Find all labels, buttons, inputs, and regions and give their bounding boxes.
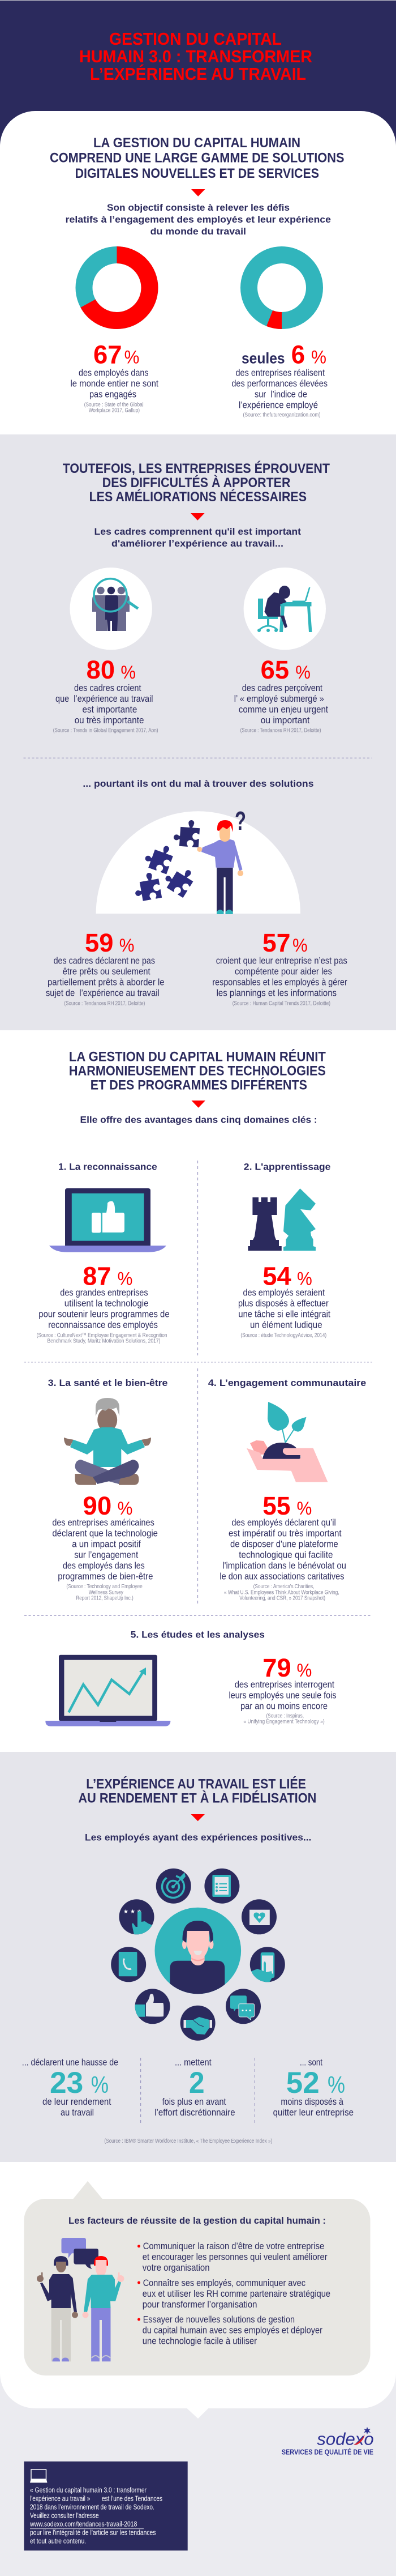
stat: 52%: 52 [286, 2066, 320, 2100]
arrow [191, 513, 205, 521]
icon: star rating touch: ★ [137, 1909, 141, 1915]
heading: harmonisation: ET DES PROGRAMMES DIFFÉRENTS [91, 1077, 307, 1093]
title: HUMAIN 3.0 : TRANSFORMER [79, 46, 312, 66]
stat: 80%: que l’expérience au travail [55, 693, 153, 704]
domain 3: health: des employés dans les [63, 1560, 145, 1571]
domain 2: learning: 2. L'apprentissage [244, 1161, 330, 1172]
icon: star rating touch: ★ [123, 1909, 128, 1915]
arrow [191, 1101, 205, 1108]
stat: 59%: sujet de l’expérience au travail [46, 988, 160, 999]
subheading: objective: relatifs à l’engagement des employés et leur expérience [66, 214, 331, 225]
subheading: executives [94, 526, 301, 549]
domain 3: health: Report 2012, ShapeUp Inc.) [76, 1594, 134, 1601]
text: further reading [29, 2486, 162, 2545]
panel: solutions [0, 111, 396, 434]
stat: 59%: (Source : Tendances RH 2017, Deloitte) [64, 1000, 145, 1006]
stat: 80%: des cadres croient [74, 683, 141, 693]
stat: 80%: % [120, 662, 136, 683]
domain 3: health [48, 1377, 167, 1601]
stat: 57%: (Source : Human Capital Trends 2017, Deloitte) [233, 1000, 330, 1006]
domain 2: learning: % [297, 1268, 312, 1289]
stat: 67%: 67 [93, 340, 122, 369]
illustration: man with puzzle pieces [96, 806, 300, 914]
logo: sodexo: sodexo [317, 2429, 374, 2449]
domain 2: learning [238, 1161, 330, 1338]
logo: sodexo: SERVICES DE QUALITÉ DE VIE [282, 2448, 373, 2456]
domain 1: recognition [37, 1161, 170, 1344]
stat: 23%: 23 [50, 2066, 83, 2100]
heading: difficulties: TOUTEFOIS, LES ENTREPRISES ÉPROUVENT [63, 460, 330, 476]
success factors list: Essayer de nouvelles solutions de gestion [143, 2314, 295, 2325]
stat: 59%: % [119, 935, 135, 956]
icon: heart on screen [242, 1899, 277, 1934]
title: GESTION DU CAPITAL [109, 29, 282, 49]
panel: performance and retention [23, 1776, 353, 2144]
panel: difficulties [0, 434, 396, 1030]
stat: 65%: ou important [261, 715, 310, 726]
icon: laptop with thumb up [49, 1188, 166, 1252]
stat: 59% [46, 928, 165, 1006]
title [79, 29, 312, 84]
icon: overwhelmed employee [244, 568, 326, 650]
illustration: employee in central circle [155, 1908, 241, 1994]
stat: 2 times: l’effort discrétionnaire [154, 2107, 235, 2118]
subheading: five areas: Elle offre des avantages dans cinq domaines clés : [80, 1114, 317, 1125]
stat: 67%: des employés dans [79, 367, 148, 378]
illustration: two employees talking [37, 2238, 124, 2361]
domain 4: community engagement: 55 [262, 1491, 290, 1520]
icon: phone touch [250, 1947, 285, 1982]
icon: laptop with rising chart [45, 1655, 170, 1726]
domain 1: recognition: pour soutenir leurs programmes de [38, 1309, 170, 1320]
domain 1: recognition: Benchmark Study, Maritz Motivation Solutions, 2017) [48, 1337, 161, 1344]
domain 3: health: 3. La santé et le bien-être [48, 1377, 167, 1388]
header band [0, 0, 396, 153]
success factors list: du capital humain avec ses employés et déployer [143, 2325, 322, 2336]
domain 4: community engagement: de disposer d'une plateforme [230, 1539, 338, 1550]
domain 2: learning: plus disposés à effectuer [238, 1298, 329, 1309]
arrow [191, 189, 205, 197]
domain 5: studies and analytics: « Unifying Engagement Technology ») [243, 1718, 325, 1725]
domain 2: learning: un élément ludique [250, 1320, 322, 1330]
stat: 80%: 80 [87, 655, 115, 684]
success factors list: Communiquer la raison d’être de votre entreprise [143, 2241, 324, 2251]
stat: 6%: seules [242, 350, 285, 367]
text: further reading: pour lire l'intégralité de l’article sur les tendances [30, 2528, 156, 2536]
success factors list: votre organisation [143, 2262, 209, 2273]
domain 3: health: (Source : Technology and Employee [66, 1583, 143, 1590]
domain 5: studies and analytics: (Source : Inspirus, [266, 1713, 304, 1720]
stat: 67%: % [124, 347, 139, 368]
domain 3: health: 90 [83, 1491, 111, 1520]
text: further reading: l'expérience au travail » [30, 2494, 90, 2502]
stat: 6%: (Source: thefutureorganization.com) [243, 412, 320, 419]
domain 3: health: % [118, 1498, 132, 1519]
stat: 59%: être prêts ou seulement [63, 966, 150, 977]
domain 2: learning: 54 [262, 1261, 291, 1290]
success factors list: pour transformer l’organisation [143, 2299, 257, 2310]
heading: difficulties: LES AMÉLIORATIONS NÉCESSAIRES [89, 489, 307, 505]
icon: star rating touch: ★ [130, 1909, 135, 1915]
stat: 52%: ... sont [300, 2057, 322, 2068]
stat: 6%: l’expérience employé [239, 399, 318, 410]
stat: 57%: 57 [262, 928, 290, 957]
domain 5: studies and analytics: 79 [262, 1653, 291, 1682]
domain 3: health: a un impact positif [72, 1539, 141, 1550]
stat: 65%: (Source : Tendances RH 2017, Deloitte) [240, 727, 321, 734]
success factors list: et encourager les personnes qui veulent améliorer [143, 2251, 328, 2262]
domain 3: health: déclarent que la technologie [52, 1528, 158, 1539]
success factors list: Connaître ses employés, communiquer avec [143, 2278, 305, 2288]
stat: 57%: % [292, 935, 308, 956]
domain 1: recognition: (Source : CultureNext™ Employee Engagement & Recognition [37, 1332, 167, 1338]
stat: 6%: sur l’indice de [255, 389, 307, 399]
icon: thumb up [135, 1989, 170, 2024]
heading: solutions: LA GESTION DU CAPITAL HUMAIN [93, 135, 300, 151]
subheading: objective: Son objectif consiste à relever les défis [107, 202, 290, 213]
stat: 67%: le monde entier ne sont [70, 378, 158, 389]
domain 4: community engagement: le don aux associations caritatives [219, 1571, 344, 1582]
stat: 23%: % [91, 2071, 109, 2098]
stat: 59%: partiellement prêts à aborder le [48, 977, 165, 988]
stat: 2 times: fois plus en avant [162, 2096, 226, 2107]
text: further reading: 2018 dans l’environnement de travail de Sodexo. [30, 2503, 154, 2511]
stat: 2 times [154, 2057, 235, 2118]
source: (Source : IBM® Smarter Workforce Institute, « The Employee Experience Index ») [104, 2138, 272, 2144]
domain 4: community engagement: (Source : America's Charities, [253, 1583, 314, 1590]
icon: star rating touch [119, 1899, 154, 1935]
text: further reading: www.sodexo.com/tendances-travail-2018 [29, 2520, 137, 2528]
domain 2: learning: une tâche si elle intégrait [238, 1309, 330, 1320]
heading: solutions [50, 135, 344, 181]
domain 5: studies and analytics: leurs employés une seule fois [229, 1690, 337, 1700]
domain 5: studies and analytics [45, 1630, 337, 1726]
stat: 59%: 59 [85, 928, 113, 957]
stat: 6%: 6 [291, 340, 305, 369]
stat: 57%: les plannings et les informations [217, 988, 337, 999]
stat: 65%: l’ « employé submergé » [234, 693, 324, 704]
stat: 80%: (Source : Trends in Global Engagement 2017, Aon) [53, 727, 158, 734]
arrow [191, 1814, 205, 1821]
heading: solutions: COMPREND UNE LARGE GAMME DE SOLUTIONS [50, 151, 344, 166]
stat: 65%: 65 [261, 655, 289, 684]
domain 4: community engagement: 4. L’engagement communautaire [208, 1377, 366, 1388]
stat: 67%: (Source : State of the Global [84, 402, 144, 408]
domain 4: community engagement: « What U.S. Employees Think About Workplace Giving, [224, 1589, 339, 1596]
subheading: objective: du monde du travail [150, 226, 246, 237]
stat: 80%: est importante [83, 704, 137, 715]
domain 5: studies and analytics: des entreprises interrogent [235, 1679, 334, 1690]
text: further reading: est l'une des Tendances [102, 2494, 162, 2502]
subheading: objective [66, 202, 331, 237]
heading: performance: AU RENDEMENT ET À LA FIDÉLISATION [78, 1790, 316, 1806]
stat: 65%: des cadres perçoivent [242, 683, 322, 693]
domain 2: learning: des employés seraient [243, 1287, 325, 1298]
stat: 6% [231, 340, 328, 419]
heading: harmonisation [69, 1048, 326, 1093]
heading: difficulties: DES DIFFICULTÉS À APPORTER [102, 475, 290, 491]
stat: 67% [70, 340, 158, 414]
panel: five domains [0, 1030, 396, 1752]
icon: laptop [30, 2470, 48, 2483]
stat: 2 times: ... mettent [175, 2057, 212, 2068]
question mark: ? [235, 806, 246, 835]
subheading: positive experiences: Les employés ayant des expériences positives... [85, 1832, 311, 1843]
heading: harmonisation: LA GESTION DU CAPITAL HUMAIN RÉUNIT [69, 1048, 326, 1064]
stat: 23%: ... déclarent une hausse de [22, 2057, 118, 2068]
domain 2: learning: (Source : étude TechnologyAdvice, 2014) [240, 1332, 326, 1338]
success factors list [137, 2241, 330, 2347]
stat: 57%: croient que leur entreprise n’est pas [216, 956, 347, 966]
icon: target [156, 1869, 191, 1904]
domain 5: studies and analytics: 5. Les études et les analyses [131, 1630, 265, 1640]
icon: chess pieces [248, 1188, 316, 1251]
heading: difficulties [63, 460, 330, 505]
stat: 65%: % [295, 662, 311, 683]
subheading: executives: Les cadres comprennent qu'il est important [94, 526, 301, 537]
icon: chat bubbles [226, 1989, 261, 2024]
domain 4: community engagement: est impératif ou très important [229, 1528, 342, 1539]
callout [24, 2181, 370, 2375]
domain 3: health: sur l’engagement [74, 1550, 138, 1560]
domain 5: studies and analytics: par an ou moins encore [240, 1700, 328, 1711]
stat: 65% [234, 655, 328, 734]
heading: harmonisation: HARMONIEUSEMENT DES TECHNOLOGIES [69, 1063, 326, 1078]
domain 3: health: des entreprises américaines [52, 1517, 154, 1528]
stat: 57%: responsables et les employés à gérer [212, 977, 347, 988]
domain 1: recognition: des grandes entreprises [60, 1287, 148, 1298]
domain 4: community engagement [208, 1377, 366, 1601]
panel: success factors [0, 2162, 396, 2419]
donut chart: 67% [84, 255, 149, 321]
stat: 23%: de leur rendement [42, 2096, 111, 2107]
subheading: solutions gap: ... pourtant ils ont du mal à trouver des solutions [83, 778, 313, 789]
callout heading: Les facteurs de réussite de la gestion du capital humain : [68, 2215, 326, 2226]
icon: clipboard [204, 1869, 239, 1904]
heading: performance: L’EXPÉRIENCE AU TRAVAIL EST LIÉE [86, 1776, 306, 1792]
heading: solutions: DIGITALES NOUVELLES ET DE SERVICES [75, 166, 319, 181]
text: further reading: et tout autre contenu. [30, 2537, 86, 2545]
icon: phone call [111, 1947, 146, 1982]
stat: 80%: ou très importante [75, 715, 144, 726]
domain 1: recognition: % [118, 1268, 132, 1289]
stat: 6%: des entreprises réalisent [235, 367, 325, 378]
stat: 67%: Workplace 2017, Gallup) [89, 407, 140, 414]
domain 4: community engagement: l'implication dans le bénévolat ou [222, 1560, 346, 1571]
domain 5: studies and analytics: % [296, 1660, 312, 1681]
stat: 52%: quitter leur entreprise [273, 2107, 354, 2118]
donut chart: 6% [249, 255, 315, 321]
icon: people under magnifier [70, 568, 152, 650]
stat: 52%: moins disposés à [281, 2096, 343, 2107]
icon: handshake [180, 2006, 216, 2041]
subheading: executives: d'améliorer l’expérience au travail... [111, 538, 283, 549]
domain 3: health: programmes de bien-être [58, 1571, 153, 1582]
icon: meditating man [64, 1398, 151, 1485]
icon: hand holding plant [247, 1402, 328, 1482]
stat: 23%: au travail [61, 2107, 94, 2118]
stat: 2 times: 2 [189, 2066, 205, 2100]
success factors list: une technologie facile à utiliser [143, 2336, 257, 2347]
stat: 52%: % [328, 2071, 345, 2098]
text: further reading: « Gestion du capital humain 3.0 : transformer [30, 2486, 147, 2494]
domain 1: recognition: 87 [83, 1261, 111, 1290]
text: further reading: Veuillez consulter l'adresse [30, 2511, 99, 2519]
domain 1: recognition: 1. La reconnaissance [58, 1161, 157, 1172]
stat: 65%: comme un enjeu urgent [239, 704, 328, 715]
stat: 57%: compétente pour aider les [235, 966, 332, 977]
title: L’EXPÉRIENCE AU TRAVAIL [90, 64, 306, 84]
stat: 67%: pas engagés [89, 389, 136, 399]
stat: 80% [53, 655, 158, 734]
domain 1: recognition: reconnaissance des employés [48, 1320, 158, 1330]
stat: 6%: % [311, 347, 326, 368]
success factors list: eux et utiliser les RH comme partenaire stratégique [143, 2288, 330, 2299]
stat: 52% [273, 2057, 354, 2118]
logo: sodexo [282, 2427, 374, 2456]
stat: 6%: des performances élevées [231, 378, 328, 389]
domain 1: recognition: utilisent la technologie [64, 1298, 148, 1309]
domain 3: health: Wellness Survey [89, 1589, 123, 1596]
stat: 57% [212, 928, 347, 1006]
domain 4: community engagement: Volunteering, and CSR, » 2017 Snapshot) [239, 1594, 325, 1601]
stat: 23% [22, 2057, 118, 2118]
domain 4: community engagement: des employés déclarent qu’il [231, 1517, 336, 1528]
domain 4: community engagement: technologique qui facilite [239, 1550, 333, 1560]
stat: 59%: des cadres déclarent ne pas [54, 956, 155, 966]
panel: further reading [24, 2462, 188, 2551]
domain 4: community engagement: % [296, 1498, 312, 1519]
heading: performance [78, 1776, 316, 1806]
